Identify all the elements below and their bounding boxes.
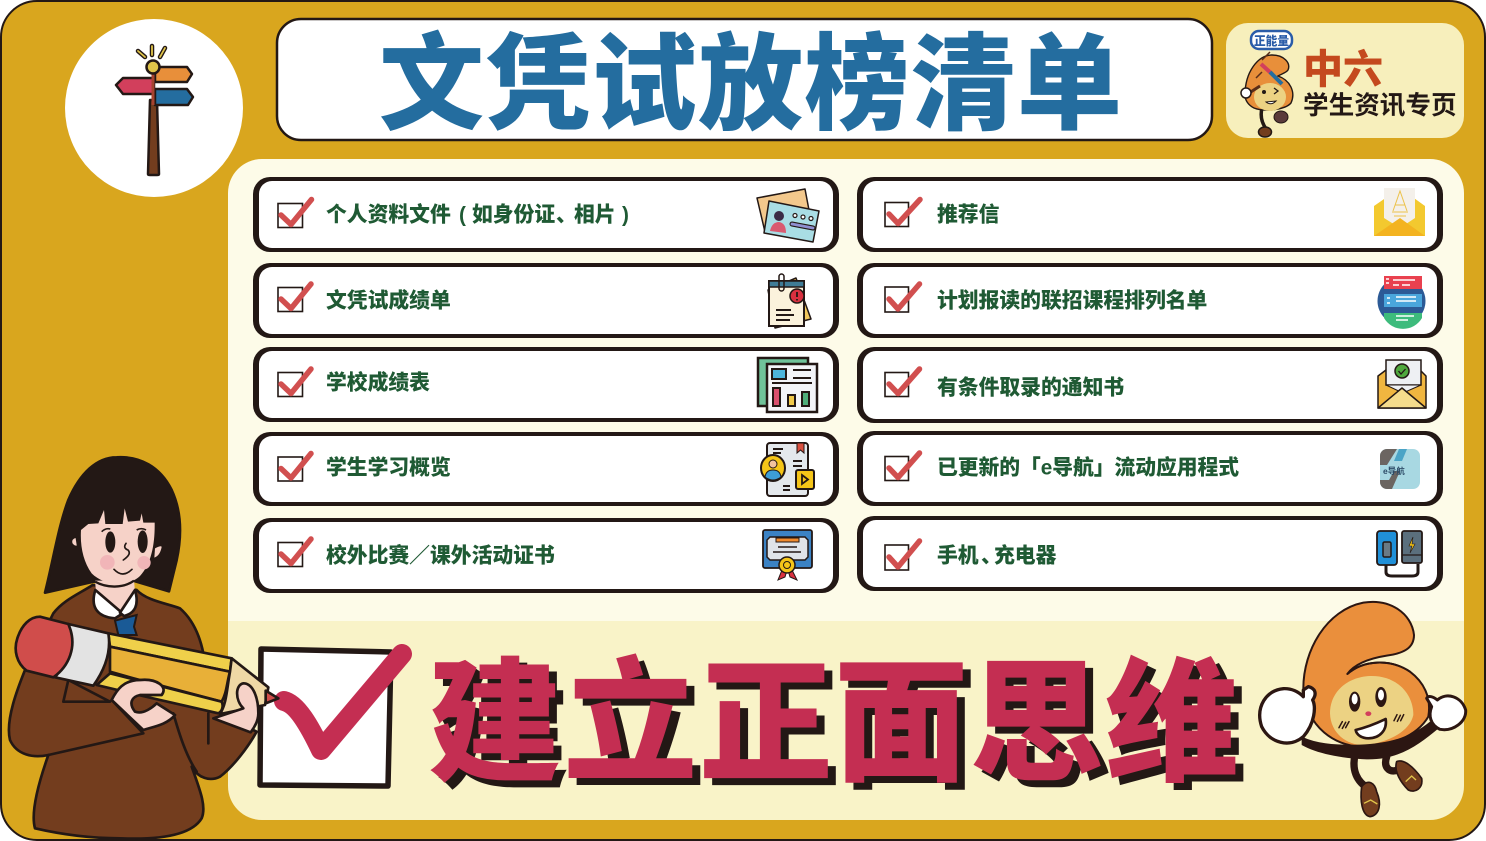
brand subtitle: 学生资讯专页 xyxy=(1303,91,1457,120)
icon: phone and power bank xyxy=(1377,531,1422,576)
checkbox xyxy=(278,369,311,396)
label: 有条件取录的通知书 xyxy=(937,376,1124,400)
illustration: mascot xyxy=(1260,602,1466,817)
icon: certificate xyxy=(763,530,812,580)
checkbox xyxy=(885,284,920,312)
panel: left row 3 xyxy=(253,347,839,422)
label: 、 xyxy=(981,544,1002,568)
title: 文凭试放榜清单 xyxy=(379,27,1122,144)
label: 、 xyxy=(556,204,577,226)
panel: right row 1 xyxy=(857,177,1443,252)
panel: right row 4 xyxy=(857,431,1443,506)
panel: right row 3 xyxy=(857,347,1443,423)
label: 文凭试成绩单 xyxy=(326,288,451,312)
label: 已更新的「e导航」流动应用程式 xyxy=(937,456,1239,480)
checkbox xyxy=(278,539,311,566)
icon: app tile xyxy=(1380,449,1420,489)
panel: left row 2 xyxy=(253,263,839,338)
pencil xyxy=(16,617,278,714)
panel: brand logo xyxy=(1226,23,1464,138)
hands xyxy=(112,680,175,730)
label: 校外比赛／课外活动证书 xyxy=(326,544,555,568)
panel: left row 4 xyxy=(253,432,839,506)
icon: acceptance envelope xyxy=(1378,360,1426,408)
title box xyxy=(277,19,1212,144)
checkbox xyxy=(278,284,311,312)
label: 如身份证 xyxy=(472,202,555,226)
checkbox xyxy=(885,453,920,480)
label: ) xyxy=(622,204,629,226)
icon: large check box xyxy=(260,649,402,786)
checkbox xyxy=(885,541,920,570)
label: 充电器 xyxy=(994,544,1057,568)
label: 计划报读的联招课程排列名单 xyxy=(937,288,1207,312)
icon: profile document xyxy=(761,443,814,496)
checkbox xyxy=(278,454,311,481)
icon: app tile: e导航 xyxy=(1383,466,1405,476)
label: 个人资料文件 xyxy=(326,202,451,226)
heading: positive thinking: 建立正面思维 xyxy=(428,650,1239,799)
legs and shoes xyxy=(1354,755,1398,788)
icon: small badge xyxy=(1251,31,1292,49)
panel: right row 2 xyxy=(857,263,1443,338)
brand name: 中六 xyxy=(1303,48,1383,92)
facial features xyxy=(105,531,115,553)
label: ( xyxy=(459,204,466,226)
head xyxy=(1303,602,1429,747)
label: 相片 xyxy=(574,204,616,226)
neck and collar xyxy=(94,581,137,635)
arms and body band xyxy=(1302,722,1437,759)
icon: ABC list xyxy=(1378,276,1426,329)
hands xyxy=(1260,687,1315,743)
panel: cream content area xyxy=(228,159,1464,820)
heading: positive thinking: 建立正面思维 xyxy=(436,657,1247,806)
label: 学生学习概览 xyxy=(326,456,451,480)
panel: right row 5 xyxy=(857,516,1443,591)
face xyxy=(1349,692,1360,712)
icon: signpost in circle xyxy=(65,19,243,197)
icon: report chart xyxy=(758,358,817,412)
icon: small mascot xyxy=(1241,52,1293,137)
label: 推荐信 xyxy=(937,202,1000,226)
checkbox xyxy=(278,200,312,228)
icon: small badge: 正能量 xyxy=(1254,33,1289,48)
panel: left row 5 xyxy=(253,518,839,593)
body xyxy=(9,585,257,839)
label: 学校成绩表 xyxy=(326,370,430,394)
icon: ID card xyxy=(757,189,819,242)
hair xyxy=(45,457,180,593)
checkbox xyxy=(885,369,920,396)
illustration: student holding pencil xyxy=(9,457,278,839)
panel: left row 1 xyxy=(253,177,839,252)
label: 手机 xyxy=(937,544,979,568)
icon: letter envelope xyxy=(1374,188,1425,236)
checkbox xyxy=(885,200,920,226)
icon: clipped note xyxy=(768,274,811,328)
face xyxy=(81,508,155,584)
